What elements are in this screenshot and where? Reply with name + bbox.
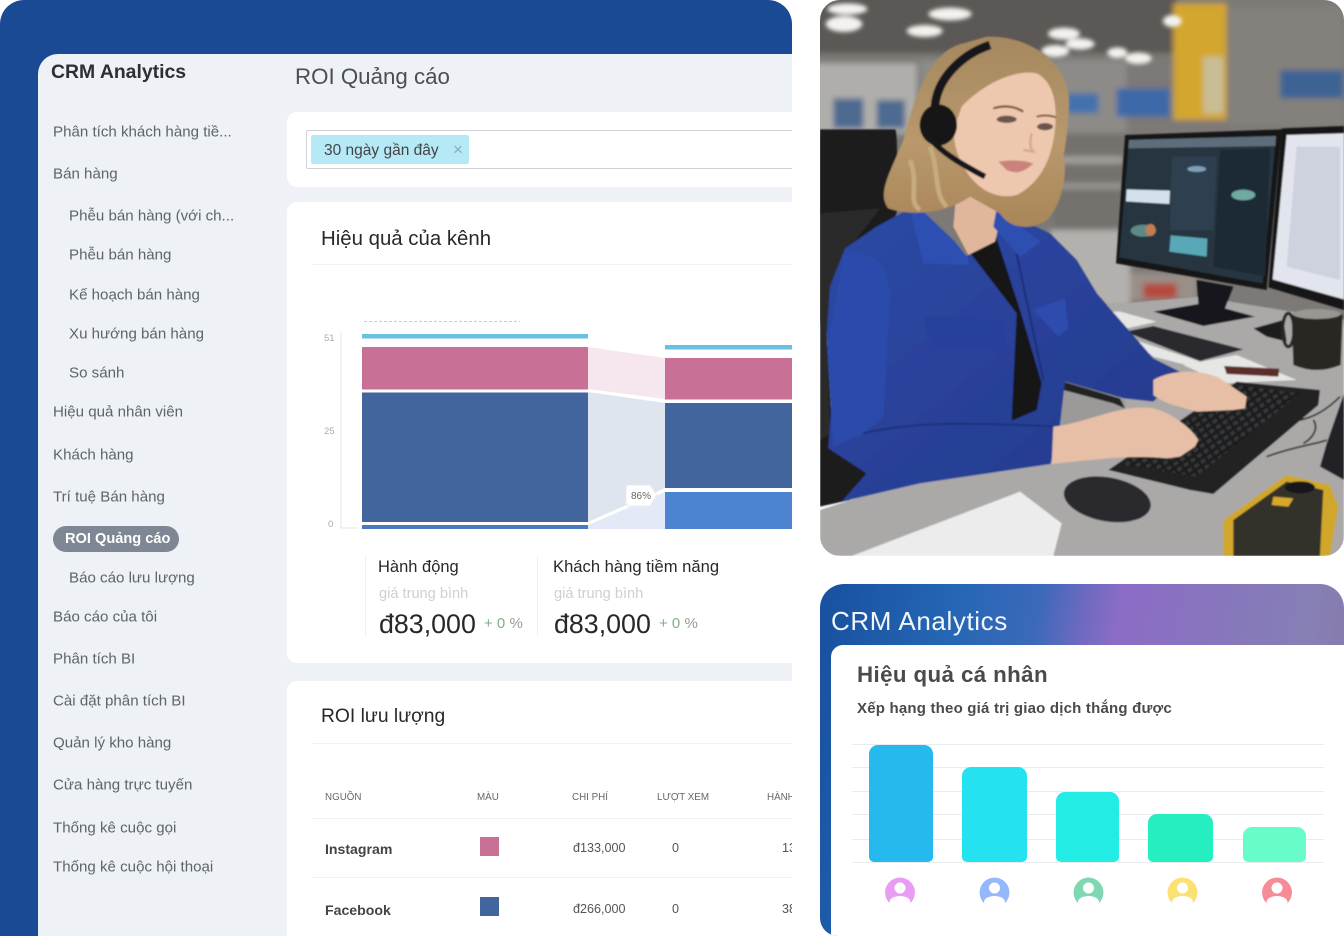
panel: CRM analytics dashboard [0,0,792,936]
agent: black shirt [967,238,1042,421]
sidebar title: CRM Analytics [51,61,186,83]
panel: traffic ROI table [287,681,792,936]
agent: headset [920,45,990,177]
table row: Facebook: đ266,000 [573,902,626,916]
card heading: Hiệu quả của kênh [321,228,491,250]
panel: sidebar navigation [51,61,234,875]
menu item: Thống kê cuộc hội thoại [53,858,213,875]
filter tag: × [453,140,463,159]
agent: jacket collars [910,208,1041,265]
panel: dashboard surface [38,54,792,936]
filter tag: 30 ngày gần đây [324,142,439,159]
panel: date filter [287,112,792,187]
menu item: Cửa hàng trực tuyến [53,776,192,793]
active menu item [53,526,179,552]
panel: individual performance card [820,584,1344,936]
stacked funnel chart [324,321,792,530]
agent: neck [953,187,1003,255]
metric: actions: + 0 % [484,615,523,632]
photo: call center agent at a factory workstation [820,0,1344,556]
ceiling lights [826,3,1182,64]
desk [820,297,1344,556]
metric: leads [537,556,788,636]
agent: eyes and mouth [993,106,1056,172]
chart subtitle: Xếp hạng theo giá trị giao dịch thắng được [857,700,1172,717]
office chair [820,129,897,507]
card heading: ROI lưu lượng [321,706,445,727]
menu item: So sánh [69,364,124,381]
menu item: Thống kê cuộc gọi [53,819,176,836]
monitor left [1116,129,1282,326]
metric: actions: đ83,000 [379,609,476,639]
table row: Instagram: Instagram [325,841,392,857]
page heading: ROI Quảng cáo [295,64,450,89]
table header: CHI PHÍ [572,792,608,803]
table row: Facebook [325,897,792,918]
monitor right [1268,126,1344,310]
table header: NGUỒN [325,792,361,803]
avatar 4 [1168,878,1198,908]
main keyboard [1108,382,1320,494]
menu item: Bán hàng [53,165,118,182]
menu item: Trí tuệ Bán hàng [53,488,165,505]
stacked funnel chart: 51 [324,333,335,344]
stacked funnel chart: 25 [324,426,335,437]
conversion label [626,485,657,506]
metric: leads: + 0 % [659,615,698,632]
red pen case [1224,366,1279,377]
papers on desk [1107,312,1297,383]
yellow multimeter [1223,475,1338,556]
avatar row [885,878,1292,908]
avatar 1 [885,878,915,908]
menu item: Xu hướng bán hàng [69,325,204,342]
menu item: Kế hoạch bán hàng [69,286,200,303]
agent: hair [884,37,1069,227]
coffee mug [1253,309,1343,370]
menu item: Phân tích BI [53,650,135,667]
card brand title: CRM Analytics [831,606,1008,636]
conversion label: 86% [631,491,651,502]
table row: Instagram [325,837,792,857]
chart heading: Hiệu quả cá nhân [857,662,1048,687]
menu item: Quản lý kho hàng [53,734,171,751]
stacked funnel chart: 0 [328,519,333,530]
menu item: Cài đặt phân tích BI [53,692,186,709]
metric: actions: giá trung bình [379,586,468,602]
table row: Facebook: 0 [672,902,679,916]
menu item: Hiệu quả nhân viên [53,403,183,420]
small keyboard [1125,326,1243,361]
table header: MÀU [477,792,499,803]
table row: Facebook: Facebook [325,902,391,918]
panel: channel performance [287,202,792,663]
bar 3 [1056,792,1119,862]
table header [325,790,792,803]
bar 2 [962,767,1027,862]
menu item: Báo cáo lưu lượng [69,569,195,586]
metric: leads: đ83,000 [554,609,651,639]
agent: face [954,73,1056,196]
filter input [306,130,808,169]
bar 1 [869,745,933,862]
avatar 3 [1074,878,1104,908]
agent: hands [1052,408,1198,464]
bar chart [852,744,1324,863]
menu item: Phân tích khách hàng tiề... [53,123,232,140]
bar 4 [1148,814,1213,862]
table row: Instagram: 0 [672,841,679,855]
swatch [480,897,499,916]
metric: actions [365,556,538,636]
swatch [480,837,499,856]
desk cables [1267,397,1340,457]
menu item: Phễu bán hàng (với ch... [69,207,234,224]
agent: blue jacket [827,208,1183,502]
menu item: Khách hàng [53,446,134,463]
table row: Instagram: đ133,000 [573,841,626,855]
table header: LƯỢT XEM [657,792,709,803]
computer mouse [1060,470,1154,529]
menu item: Phễu bán hàng [69,246,171,263]
white chart area [831,645,1344,936]
active menu item: ROI Quảng cáo [65,531,170,547]
notebook [852,492,1062,556]
metric: leads: giá trung bình [554,586,643,602]
filter tag [311,135,469,164]
menu item: Báo cáo của tôi [53,608,157,625]
avatar 5 [1262,878,1292,908]
metric: actions: Hành động [378,558,459,576]
bar 5 [1243,827,1306,862]
avatar 2 [980,878,1010,908]
factory background [810,0,1344,323]
metric: leads: Khách hàng tiềm năng [553,557,719,576]
